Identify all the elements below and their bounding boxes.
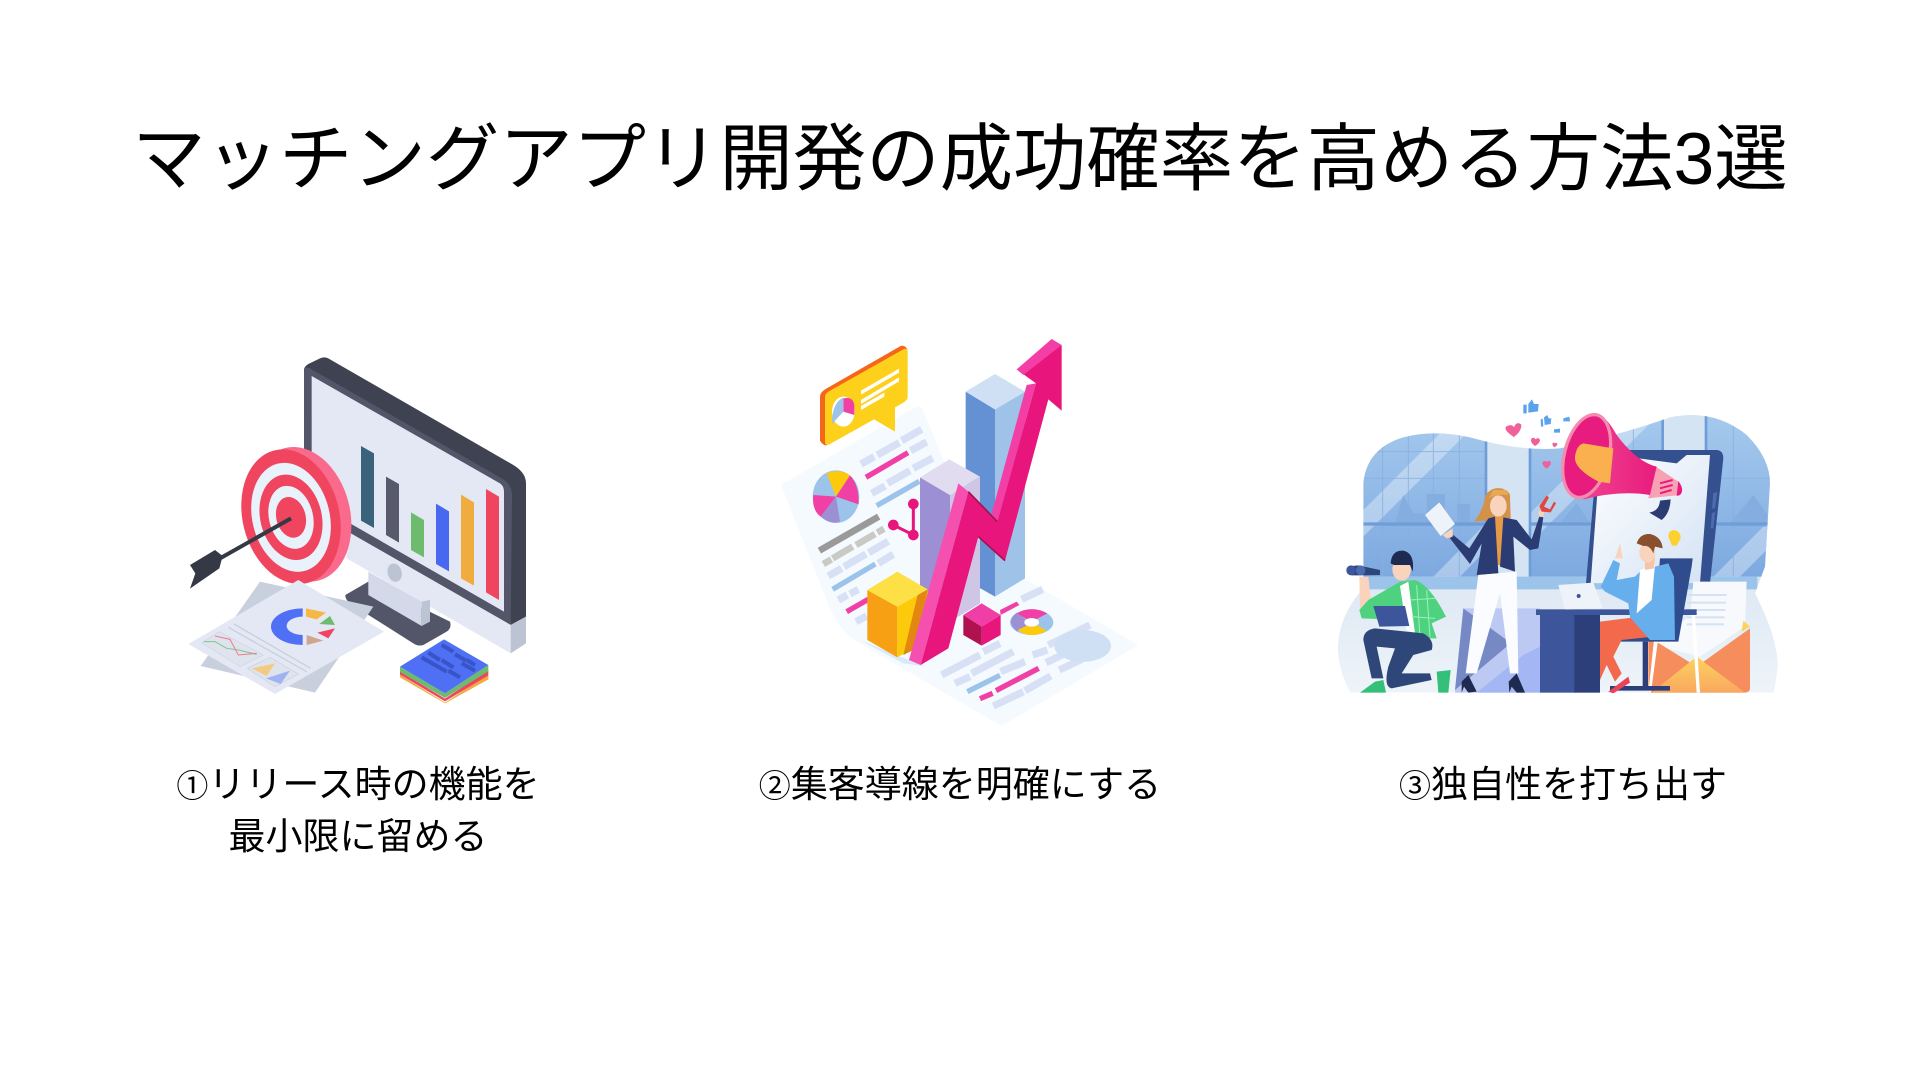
screen bar chart: [361, 446, 499, 600]
man with binoculars: [1346, 551, 1451, 693]
report papers: [188, 580, 384, 694]
desk: [1536, 609, 1700, 693]
network icon: [888, 499, 919, 540]
curved report sheet: [782, 407, 1138, 725]
megaphone: [1553, 408, 1682, 520]
arrow: [190, 518, 291, 589]
rising arrow: [909, 339, 1062, 665]
tall blue bar: [966, 374, 1025, 597]
illustrations: [188, 339, 1778, 725]
speech bubble: [820, 346, 908, 445]
caption 1: 最小限に留める: [228, 816, 488, 857]
envelope: [1648, 582, 1750, 693]
book stack: [400, 639, 488, 703]
yellow block: [860, 572, 928, 667]
phone: [1586, 450, 1723, 583]
illustration 2: growth chart: [782, 339, 1138, 725]
hearts and thumbs: [1505, 399, 1570, 469]
floor triangles: [1455, 608, 1540, 693]
title: マッチングアプリ開発の成功確率を高める方法3選: [132, 118, 1788, 200]
illustration 3: marketing team: [1338, 400, 1778, 694]
woman presenting: [1425, 488, 1556, 693]
monitor: [304, 357, 526, 653]
pale blob: [1054, 630, 1111, 662]
pie chart: [813, 470, 859, 523]
caption 3: ③独自性を打ち出す: [1399, 764, 1727, 805]
caption 2: ②集客導線を明確にする: [759, 764, 1161, 805]
office background: [1338, 415, 1778, 692]
donut chart: [1010, 609, 1053, 635]
red cube: [963, 602, 1019, 646]
illustration 1: monitor with target: [188, 357, 526, 703]
target: [228, 436, 365, 595]
caption 1: ①リリース時の機能を: [176, 764, 540, 805]
man at laptop on chair: [1558, 530, 1693, 693]
purple bar: [920, 459, 980, 622]
caption 1: [176, 764, 540, 857]
